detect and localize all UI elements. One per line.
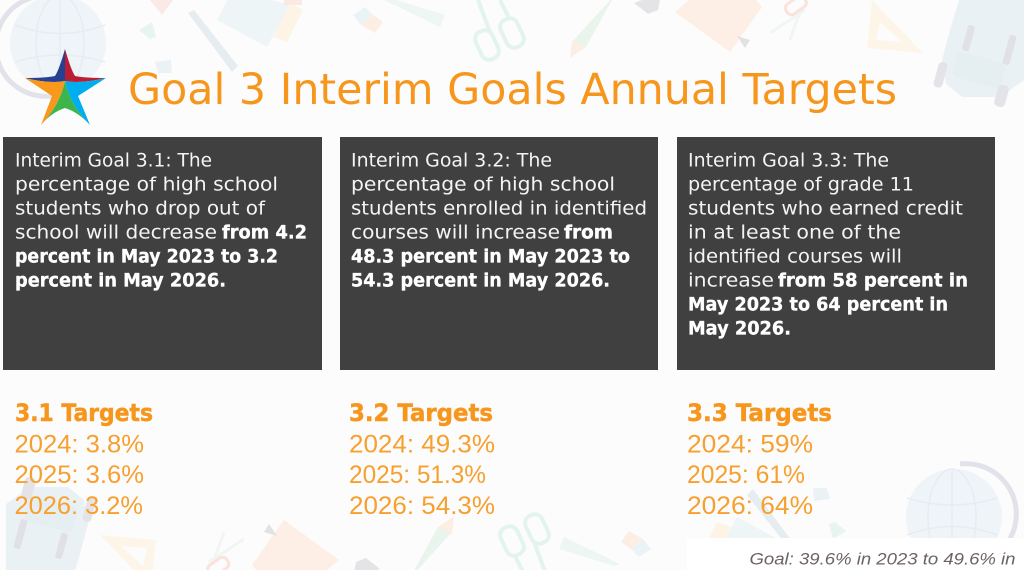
panel: interim goal 3.1: Interim Goal 3.1: The: [15, 150, 212, 172]
panel: interim goal 3.3: Interim Goal 3.3: The: [688, 150, 889, 172]
targets 3.3: 2025: 61%: [687, 461, 805, 489]
targets 3.2: [349, 399, 495, 520]
panel: interim goal 3.2: Interim Goal 3.2: The: [351, 150, 552, 172]
panel: interim goal 3.3: May 2023 to 64 percent in: [688, 294, 948, 316]
panel: interim goal 3.3: increase: [688, 270, 774, 292]
panel: interim goal 3.2: from: [564, 222, 613, 244]
panel: interim goal 3.2: [340, 137, 658, 370]
targets 3.1: 2025: 3.6%: [14, 461, 144, 489]
targets 3.2: 2025: 51.3%: [349, 461, 486, 489]
panel: interim goal 3.1: students who drop out of: [15, 198, 266, 220]
panel: interim goal 3.1: percentage of high school: [15, 174, 278, 196]
logo: multicolour star: [25, 49, 106, 125]
targets 3.2: 3.2 Targets: [349, 399, 493, 427]
targets 3.1: 2026: 3.2%: [14, 492, 143, 520]
panel: interim goal 3.3: in at least one of the: [688, 222, 901, 244]
targets 3.3: 3.3 Targets: [687, 399, 832, 427]
targets 3.1: [14, 399, 153, 520]
panel: interim goal 3.2: percentage of high school: [351, 174, 615, 196]
panel: interim goal 3.3: [677, 137, 995, 370]
targets 3.1: 3.1 Targets: [15, 399, 153, 427]
panel: interim goal 3.2: courses will increase: [351, 222, 560, 244]
panel: interim goal 3.3: students who earned credit: [688, 198, 963, 220]
panel: interim goal 3.1: school will decrease: [15, 222, 217, 244]
panel: interim goal 3.2: 54.3 percent in May 2026.: [351, 270, 610, 292]
panel: interim goal 3.1: percent in May 2026.: [15, 270, 226, 292]
panel: interim goal 3.3: percentage of grade 11: [688, 174, 914, 196]
panel: interim goal 3.2: 48.3 percent in May 2023 to: [351, 246, 630, 268]
panel: interim goal 3.1: from 4.2: [222, 222, 307, 244]
targets 3.1: 2024: 3.8%: [14, 430, 144, 458]
panel: interim goal 3.2: students enrolled in identified: [351, 198, 647, 220]
panel: interim goal 3.1: percent in May 2023 to 3.2: [15, 246, 278, 268]
title: Goal 3 Interim Goals Annual Targets: [128, 65, 897, 115]
footer note: Goal: 39.6% in 2023 to 49.6% in: [750, 550, 1016, 568]
panel: interim goal 3.1: [3, 137, 322, 370]
targets 3.3: 2024: 59%: [687, 430, 813, 458]
targets 3.2: 2026: 54.3%: [349, 492, 495, 520]
footer note: [687, 538, 1024, 570]
targets 3.3: [687, 399, 832, 520]
panel: interim goal 3.3: from 58 percent in: [778, 270, 968, 292]
targets 3.2: 2024: 49.3%: [349, 430, 495, 458]
panel: interim goal 3.3: May 2026.: [688, 318, 791, 340]
targets 3.3: 2026: 64%: [687, 492, 813, 520]
panel: interim goal 3.3: identified courses will: [688, 246, 902, 268]
